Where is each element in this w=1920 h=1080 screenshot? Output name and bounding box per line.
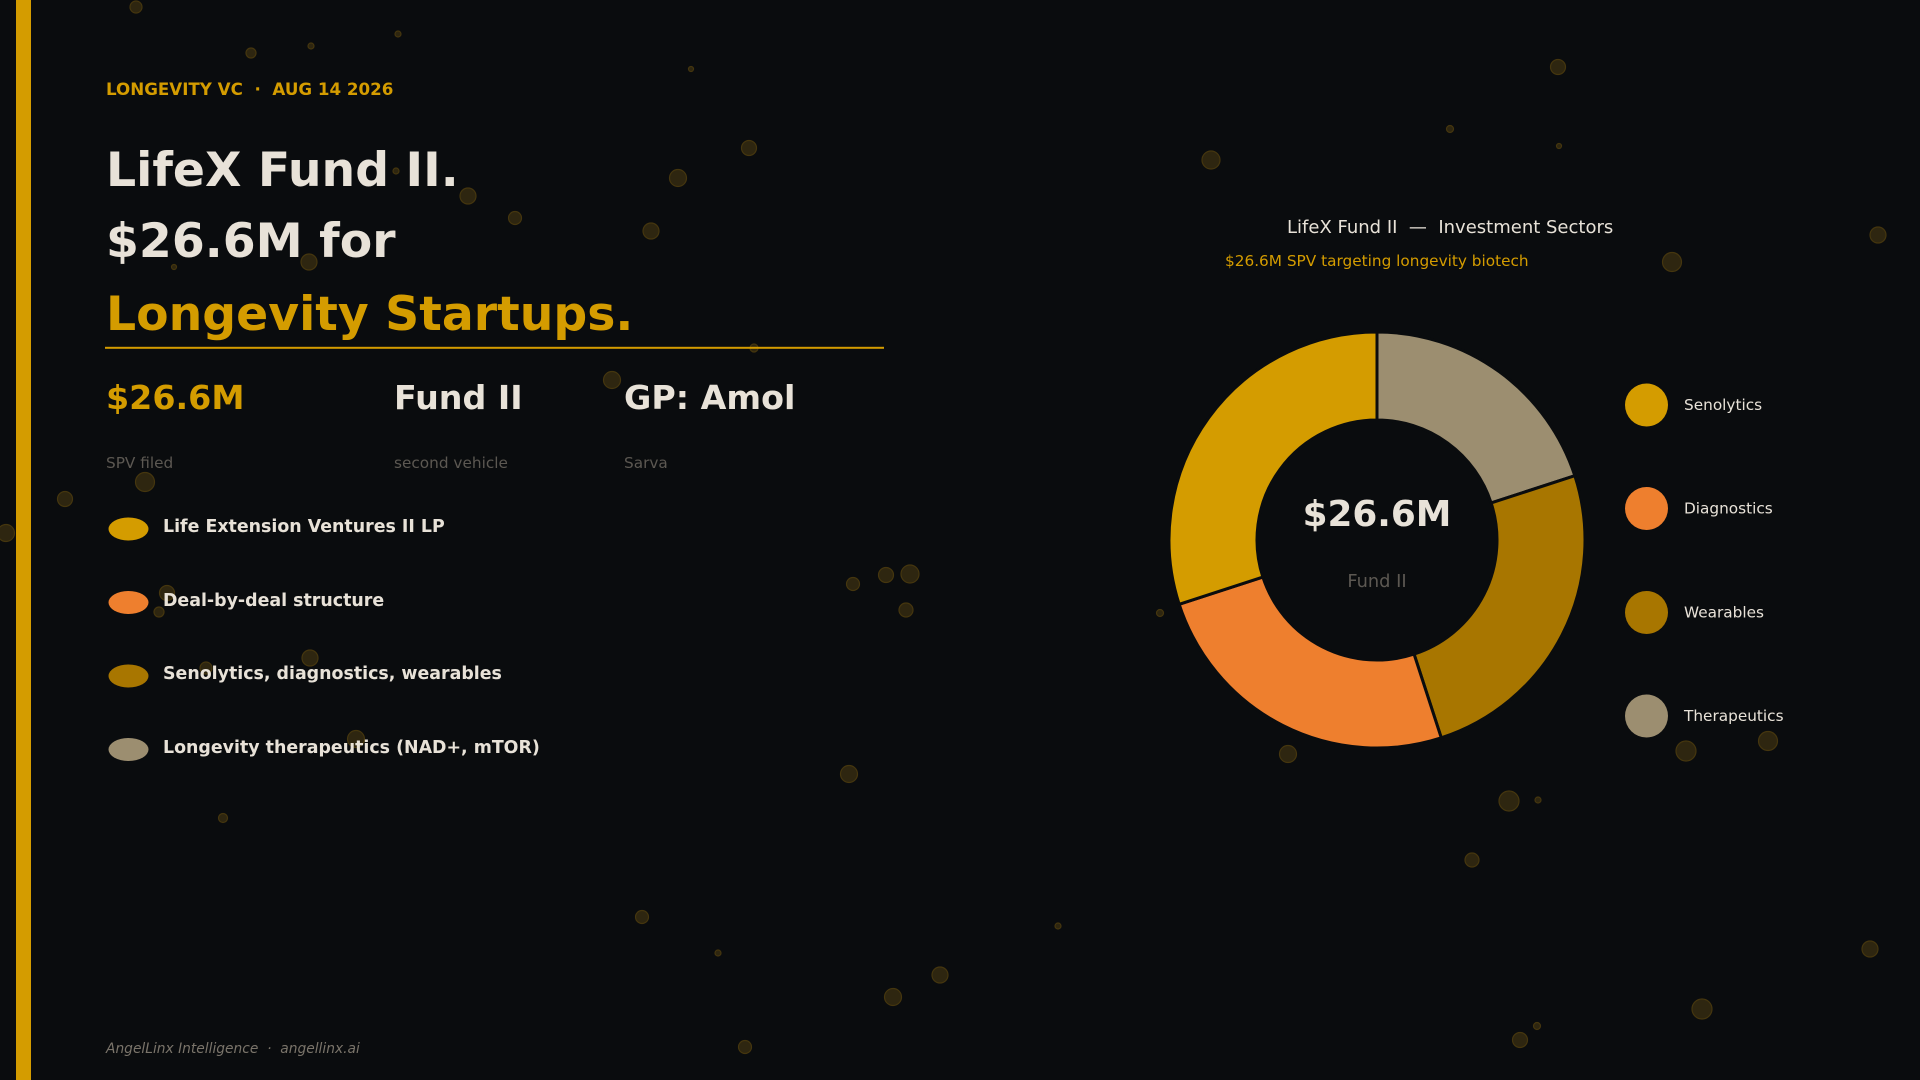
stat: amount: SPV filed <box>106 454 173 472</box>
chart legend <box>1625 384 1784 738</box>
legend: senolytics <box>1625 384 1762 426</box>
stat: amount <box>106 378 244 472</box>
stat: fund: second vehicle <box>394 454 508 472</box>
left accent bar <box>16 0 31 1080</box>
eyebrow label: LONGEVITY VC · AUG 14 2026 <box>106 79 393 99</box>
donut chart <box>1169 332 1585 748</box>
stat: fund <box>394 378 523 472</box>
chart title: LifeX Fund II — Investment Sectors <box>1287 217 1613 238</box>
title: LifeX Fund II. <box>106 143 459 198</box>
donut centre value: $26.6M <box>1303 494 1451 535</box>
legend: senolytics: Senolytics <box>1684 396 1762 414</box>
footer: AngelLinx Intelligence · angellinx.ai <box>105 1041 360 1057</box>
legend: diagnostics: Diagnostics <box>1684 500 1773 518</box>
legend: diagnostics <box>1625 487 1773 530</box>
segment: wearables <box>1414 476 1585 738</box>
bullet 3: Senolytics, diagnostics, wearables <box>163 664 502 684</box>
bullet 1: Life Extension Ventures II LP <box>163 517 445 537</box>
donut centre label: Fund II <box>1347 571 1407 592</box>
stat: GP: Sarva <box>624 454 668 472</box>
stat: GP: GP: Amol <box>624 378 795 417</box>
legend: wearables: Wearables <box>1684 604 1764 622</box>
legend: therapeutics: Therapeutics <box>1683 707 1784 725</box>
segment: senolytics <box>1169 332 1377 604</box>
title: $26.6M for <box>106 214 396 269</box>
bullet 4: Longevity therapeutics (NAD+, mTOR) <box>163 738 540 758</box>
bullet 2 <box>108 591 384 614</box>
legend: wearables <box>1625 591 1764 634</box>
divider <box>105 347 884 349</box>
stat: fund: Fund II <box>394 378 523 417</box>
stat: amount: $26.6M <box>106 378 244 417</box>
bullet 2: Deal-by-deal structure <box>163 591 384 611</box>
title <box>106 143 633 342</box>
bullet list <box>108 517 540 761</box>
chart subtitle: $26.6M SPV targeting longevity biotech <box>1225 252 1529 270</box>
segment: therapeutics <box>1377 332 1575 503</box>
title: Longevity Startups. <box>106 287 633 342</box>
segment: diagnostics <box>1179 577 1441 748</box>
stats row <box>106 378 795 472</box>
legend: therapeutics <box>1625 694 1784 738</box>
stat: GP <box>624 378 795 472</box>
